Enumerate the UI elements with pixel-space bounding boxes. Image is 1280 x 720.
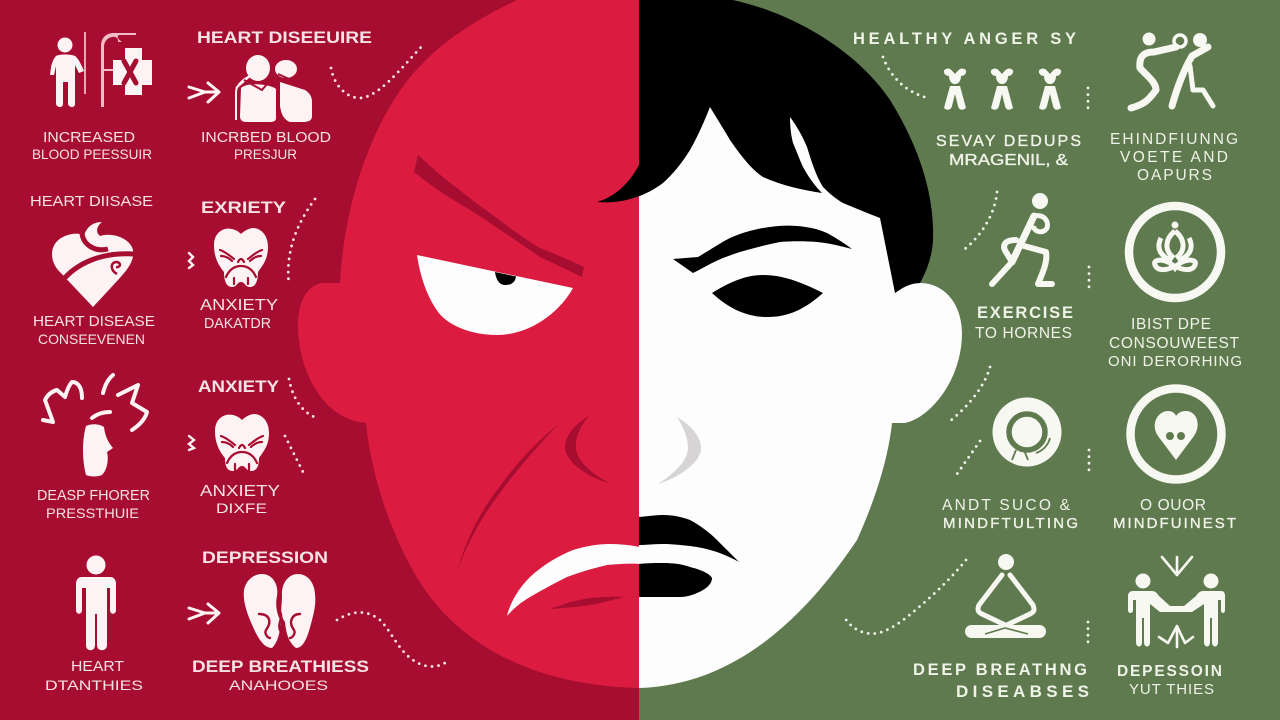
dotted line R9 [1087, 622, 1089, 647]
text: yut thies: YUT THIES [1129, 681, 1214, 698]
text: ehindfiunng: EHINDFIUNNG [1110, 131, 1238, 148]
lower lip line [550, 597, 624, 609]
text: dixfe: DIXFE [216, 500, 267, 516]
white nose crescent [658, 417, 701, 484]
dotted curve R1 [883, 57, 928, 98]
text: heart: HEART [71, 658, 124, 675]
white side eye [712, 275, 823, 317]
icon: three figures [944, 69, 1061, 110]
white brow [673, 226, 852, 273]
icon: squiggle 2 [189, 436, 194, 450]
text: deasp fhorer: DEASP FHORER [37, 487, 150, 504]
text: o ouor: O OUOR [1140, 497, 1206, 514]
text: oapurs: OAPURS [1137, 167, 1212, 184]
heading: deep breathng: DEEP BREATHNG [913, 661, 1087, 679]
text: pressthuie: PRESSTHUIE [46, 505, 139, 521]
text: center column pressure: PRESJUR [234, 146, 297, 162]
text: conseevenen: CONSEEVENEN [38, 331, 145, 347]
icon: two people shaking hands [1128, 557, 1225, 647]
text: increased blood pressure: INCREASED [43, 129, 135, 146]
dotted curve 2 [288, 199, 315, 285]
text: mindfuinest: MINDFUINEST [1113, 515, 1236, 532]
text: mragenil: MRAGENIL, & [949, 152, 1068, 169]
text: consouweest: CONSOUWEEST [1109, 335, 1240, 352]
dotted line R2 [1087, 88, 1089, 112]
text: depessoin: DEPESSOIN [1117, 663, 1222, 680]
icon: exercise lunge [992, 193, 1052, 284]
dotted curve R5 [950, 367, 990, 421]
text: anxiety label: ANXIETY [200, 297, 278, 314]
panel: red background [0, 0, 639, 720]
mouth lower black [639, 563, 712, 597]
dotted curve R6 [957, 441, 980, 474]
red half of face [298, 0, 639, 688]
dotted line R4 [1088, 267, 1090, 292]
icon: squiggle 1 [189, 253, 193, 268]
heading: depression: DEPRESSION [202, 548, 328, 567]
text: center column blood: INCRBED BLOOD [201, 129, 331, 146]
heading: HEART DISEEUIRE [197, 28, 372, 47]
panel: effects of unhealthy anger [30, 28, 445, 693]
heading: deep breathiess: DEEP BREATHIESS [192, 657, 369, 676]
icon: head with stress squiggles [43, 375, 147, 476]
icon: two people embracing [236, 55, 312, 122]
text: dakatdr: DAKATDR [204, 315, 271, 332]
red cheek wrinkle [457, 424, 559, 572]
icon: heart in ring [1130, 388, 1222, 480]
heading: heart disease: HEART DIISASE [30, 193, 153, 210]
text: exercise: EXERCISE [977, 304, 1073, 322]
text: ibist dpe: IBIST DPE [1131, 316, 1211, 333]
dotted curve 3 [289, 379, 317, 418]
red eye [417, 255, 573, 335]
icon: standing person [76, 556, 116, 650]
panel: green background [639, 0, 1280, 720]
text: sevay dedups: SEVAY DEDUPS [936, 133, 1081, 150]
text: anxiety second label: ANXIETY [200, 483, 280, 500]
white half of face [639, 90, 962, 688]
heading: exriety: EXRIETY [201, 198, 287, 217]
dotted curve 1 [331, 45, 423, 98]
heading: anxiety: ANXIETY [198, 377, 280, 396]
mouth upper black [639, 515, 739, 562]
text: andt suco: ANDT SUCO & [942, 497, 1071, 514]
illustration: split face [298, 0, 962, 688]
icon: lotus in ring [1129, 206, 1221, 298]
icon: donut target [992, 398, 1062, 466]
dotted curve 5 [337, 612, 445, 666]
icon: meditating figure [965, 554, 1046, 638]
dotted curve 4 [285, 436, 303, 472]
icon: arrow 2 [189, 604, 219, 623]
mouth white bar [507, 544, 640, 616]
text: anahooes: ANAHOOES [229, 677, 328, 693]
icon: heart [52, 222, 134, 307]
hair [597, 0, 933, 293]
heading: healthy anger: HEALTHY ANGER SY [853, 30, 1076, 48]
text: heart disease consequences: HEART DISEASE [33, 313, 155, 330]
red brow [414, 155, 584, 277]
text: voete and: VOETE AND [1120, 149, 1228, 166]
icon: stressed mask 2 [215, 414, 269, 471]
heading: diseabses: DISEABSES [956, 682, 1089, 701]
dotted line R7 [1088, 450, 1090, 476]
red nose crescent [565, 416, 611, 484]
text: to hornes: TO HORNES [975, 325, 1072, 342]
icon: lungs [244, 574, 315, 648]
text: blood pressure line: BLOOD PEESSUIR [32, 146, 152, 162]
text: oni derorhing: ONI DERORHING [1108, 353, 1242, 370]
dotted curve R8 [843, 560, 966, 634]
text: mindftulting: MINDFTULTING [943, 515, 1078, 532]
icon: two figures exercising [1131, 32, 1213, 108]
text: dtanthies: DTANTHIES [45, 677, 143, 693]
dotted curve R3 [961, 192, 997, 252]
panel: healthy anger strategies [843, 30, 1242, 701]
icon: person beside medical cross [50, 32, 152, 107]
red eye pupil [495, 272, 516, 285]
icon: stressed mask 1 [214, 228, 268, 287]
icon: arrow 1 [189, 83, 219, 102]
